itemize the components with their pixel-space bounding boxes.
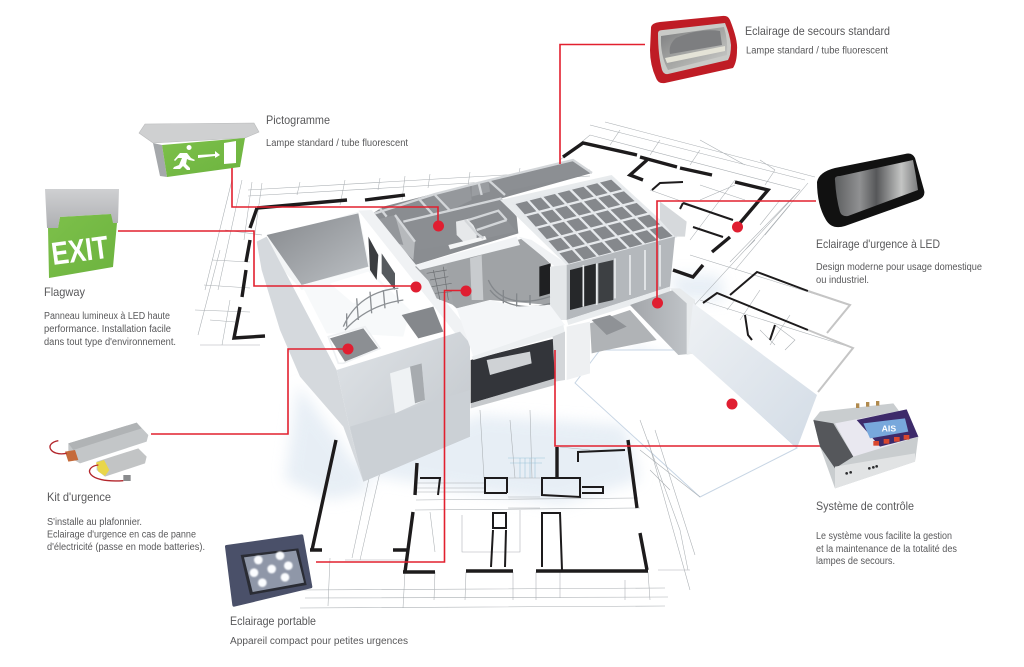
grey plan walls: [808, 291, 853, 392]
cross beam and central back wall: [415, 237, 568, 320]
text: flagway description: dans tout type d'environnement.: [44, 337, 176, 348]
back rooms of the upper floor: [370, 160, 592, 265]
front wall: [337, 332, 470, 482]
left room: [257, 212, 410, 337]
product: flagway exit panel: [45, 189, 119, 278]
product: pictogram exit sign: [139, 123, 259, 177]
central diagonal wall: [358, 210, 470, 343]
text: flagway description: Panneau lumineux à LED haute: [44, 311, 170, 322]
text: control description: lampes de secours.: [816, 556, 895, 567]
heading: standard emergency light: Eclairage de secours standard: [745, 24, 890, 38]
text: control description: Le système vous facilite la gestion: [816, 531, 952, 542]
text: LED description: Design moderne pour usage domestique: [816, 262, 982, 273]
soft blue shadows on plans: [285, 275, 725, 505]
heading: flagway: Flagway: [44, 285, 85, 299]
lower level: [471, 310, 657, 408]
text: LED description: [816, 262, 982, 286]
architectural floor plans: [195, 122, 853, 608]
curved balcony railing: [488, 280, 592, 307]
text: kit description: Eclairage d'urgence en cas de panne: [47, 530, 196, 540]
heading: portable: Eclairage portable: [230, 614, 316, 628]
sign arrow and door: [198, 141, 236, 164]
text: flagway description: performance. Installation facile: [44, 324, 171, 335]
heading: LED emergency light: Eclairage d'urgence à LED: [816, 237, 940, 251]
heading: control system: Système de contrôle: [816, 499, 914, 513]
location dots: [342, 220, 743, 410]
heavy wall lines: [234, 143, 768, 572]
product: portable light: [227, 536, 311, 605]
thin drafting lines: [195, 122, 853, 608]
text: flagway description: [44, 311, 176, 348]
connector lines: [118, 44, 820, 562]
running man icon: [173, 145, 195, 170]
heading: pictogramme: Pictogramme: [266, 113, 330, 127]
roof grid: [500, 175, 677, 267]
product: emergency kit: [50, 423, 148, 481]
glass wall: [567, 202, 687, 325]
product: flagway exit panel: EXIT: [49, 229, 111, 272]
product: control system: AIS: [882, 424, 896, 434]
text: standard lamp: Lampe standard / tube fluorescent: [746, 46, 888, 56]
text: kit description: d'électricité (passe en mode batteries).: [47, 542, 205, 553]
product: standard emergency light: [650, 16, 737, 83]
text: control description: et la maintenance de la totalité des: [816, 544, 957, 555]
interior small rooms: [328, 307, 443, 363]
right grey wall: [630, 288, 695, 355]
long white wall: [688, 303, 817, 448]
central floor: [457, 300, 565, 357]
text: kit description: [47, 517, 205, 553]
text: LED description: ou industriel.: [816, 275, 869, 286]
product: control system: [813, 401, 918, 488]
text: portable description: Appareil compact pour petites urgences: [230, 636, 408, 647]
text: control description: [816, 531, 957, 567]
right sheet: [575, 350, 797, 497]
heading: kit: Kit d'urgence: [47, 490, 111, 504]
plan rooms: [420, 182, 808, 570]
outer left side: [257, 237, 363, 482]
3D white house model: [257, 175, 695, 482]
text: kit description: S'installe au plafonnier.: [47, 517, 142, 528]
text: pictogramme lamp: Lampe standard / tube fluorescent: [266, 138, 408, 149]
product: black LED emergency light: [817, 154, 924, 227]
